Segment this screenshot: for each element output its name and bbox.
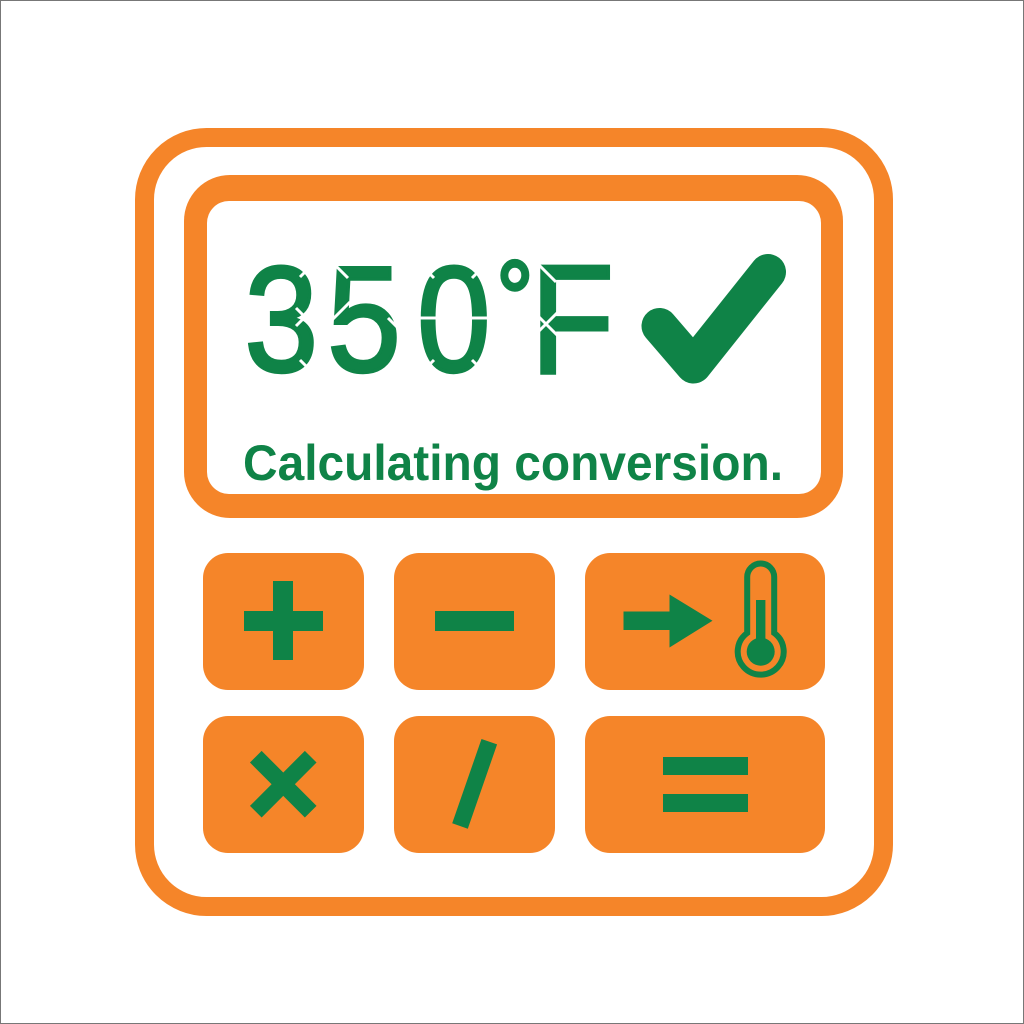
icon: check mark — [660, 272, 768, 366]
display panel — [184, 175, 843, 518]
icon: arrow — [624, 594, 712, 648]
temperature readout: F — [531, 233, 614, 406]
button: divide — [394, 716, 555, 853]
button: multiply — [203, 716, 364, 853]
button: convert to temperature — [585, 553, 825, 690]
button: plus — [203, 553, 364, 690]
status text: Calculating conversion. — [243, 435, 783, 491]
temperature readout: 3 — [245, 235, 318, 403]
temperature readout: ° — [496, 238, 533, 356]
button: equals — [585, 716, 825, 853]
temperature readout: 0 — [417, 235, 491, 403]
temperature readout: 5 — [327, 235, 401, 403]
temperature readout — [245, 233, 614, 406]
button: minus — [394, 553, 555, 690]
icon: thermometer — [738, 564, 784, 675]
calculator body — [144, 138, 884, 906]
